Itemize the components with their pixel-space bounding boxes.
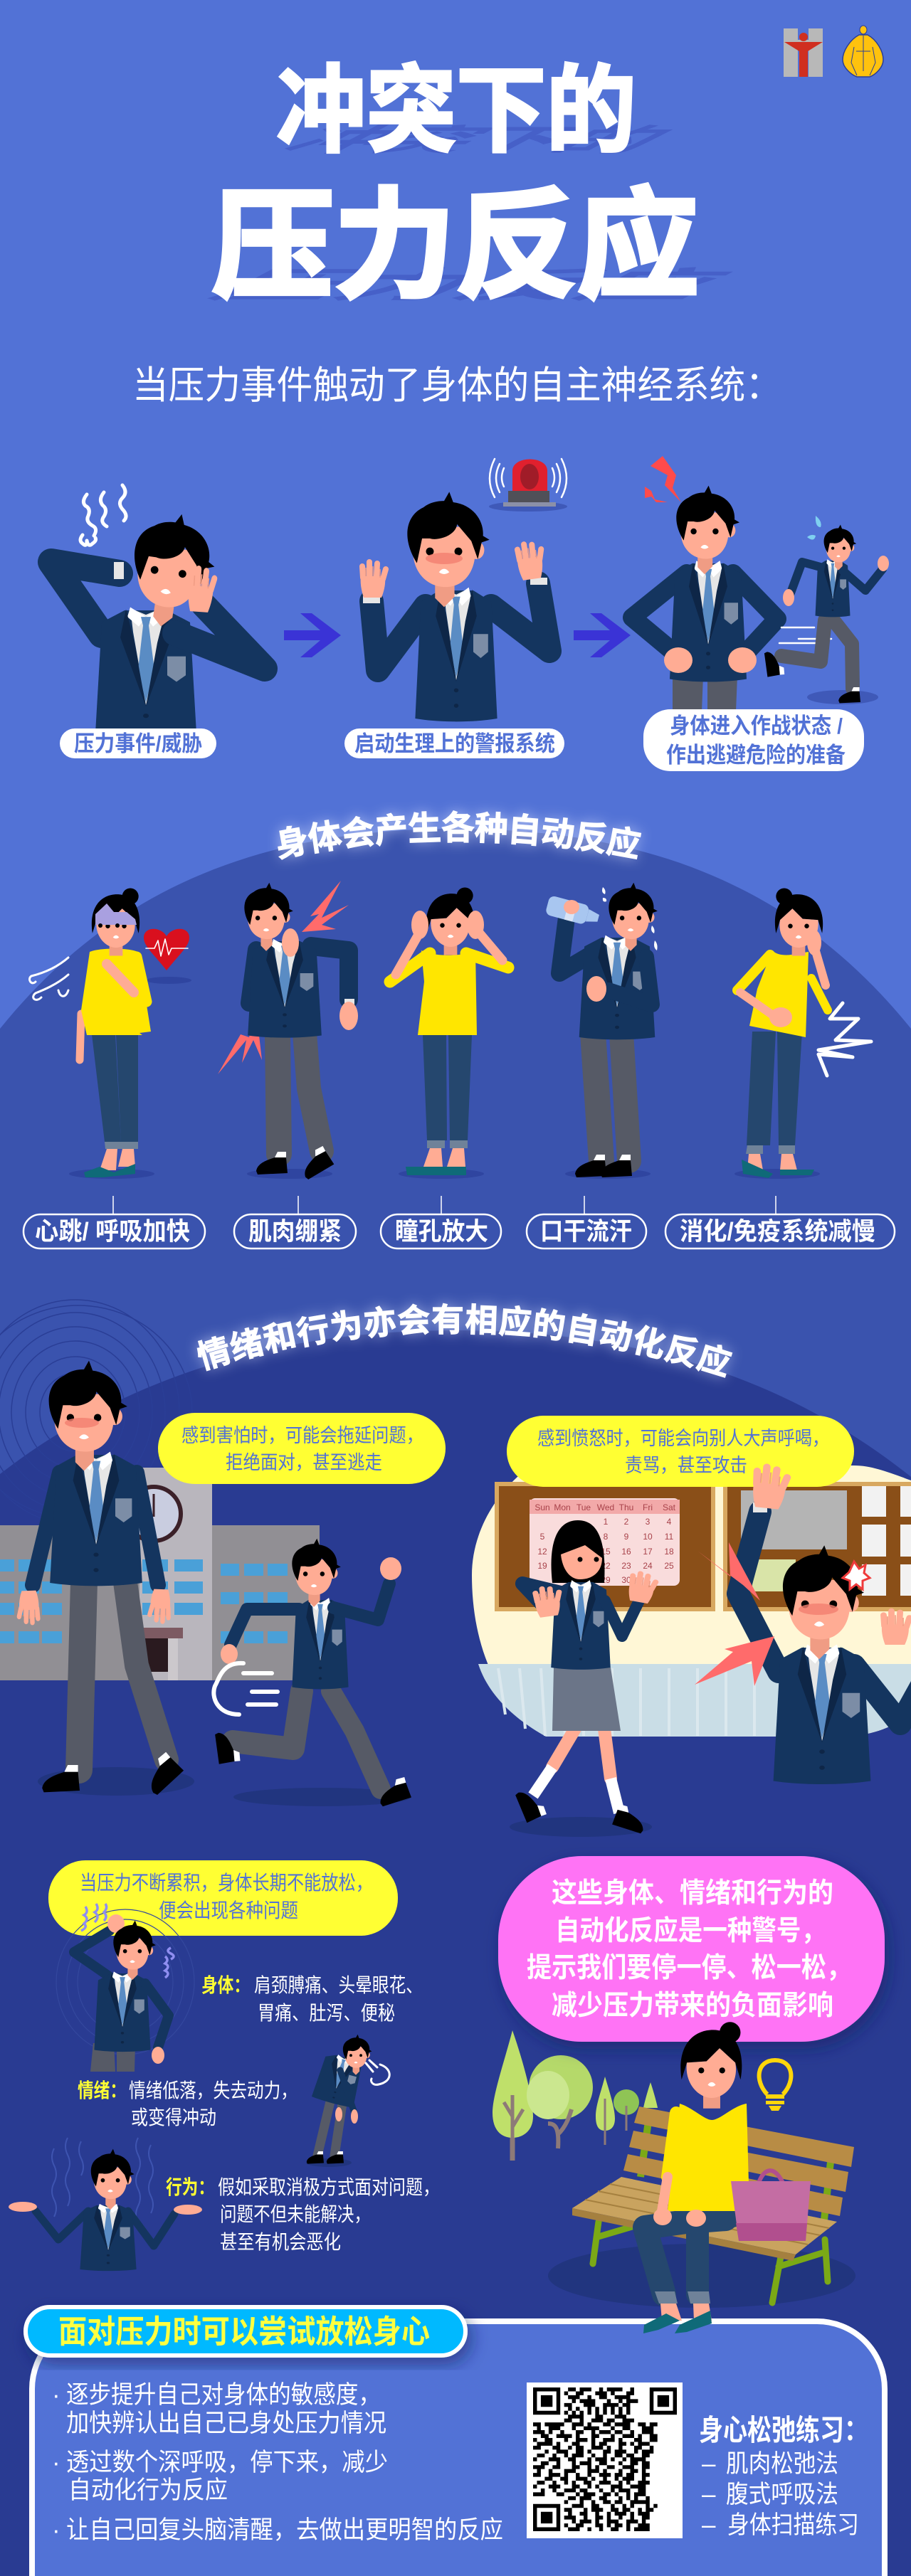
bubble: warning message (498, 1856, 885, 2042)
label: pupils (381, 1214, 501, 1249)
icon: white jagged spark (818, 1003, 871, 1076)
title (192, 58, 749, 313)
label: digestion: 消化/免疫系统减慢 (680, 1218, 875, 1246)
calendar: 29 (601, 1575, 611, 1585)
scene: woman relaxing on bench (548, 2022, 855, 2333)
handbag (731, 2170, 811, 2241)
bubble: when afraid: 感到害怕时，可能会拖延问题， (181, 1425, 423, 1446)
text: behaviour problems (166, 2176, 440, 2253)
tree 1 (493, 2030, 533, 2161)
icon: worry wavy lines (52, 2138, 153, 2223)
calendar: 4 (667, 1517, 672, 1527)
figure: man hit by stress event (51, 485, 265, 749)
icon: red lightning (645, 456, 681, 502)
pill: fight or flight: 作出逃避危险的准备 (666, 743, 846, 768)
figure: woman with fast heartbeat (30, 888, 191, 1179)
figure: small man running away (764, 516, 889, 704)
relaxation exercises (699, 2414, 868, 2539)
tips text: · (52, 2381, 60, 2409)
figure: woman with dilated pupils (390, 887, 508, 1179)
heading: body automatic reactions: 身体会产生各种自动反应 (278, 810, 642, 860)
title shadow: 冲突下的 (265, 123, 690, 157)
title shadow: 压力反应 (192, 266, 749, 305)
calendar: 3 (646, 1517, 651, 1527)
calendar: 25 (664, 1561, 674, 1571)
tips text: 自动化行为反应 (68, 2476, 228, 2504)
text: body problems: 身体： (201, 1974, 250, 1996)
tips text: 让自己回复头脑清醒，去做出更明智的反应 (66, 2516, 503, 2544)
calendar: 11 (665, 1532, 674, 1542)
woman torso (668, 2104, 749, 2211)
tips text: 透过数个深呼吸，停下来，减少 (66, 2449, 388, 2476)
figure: man with dizziness (56, 1904, 194, 2072)
calendar: Tue (576, 1502, 591, 1512)
bottom panel (32, 2321, 885, 2576)
reaction labels (23, 1196, 895, 1249)
calendar: 18 (664, 1547, 674, 1557)
text: body problems: 肩颈膊痛、头晕眼花、 (254, 1974, 423, 1996)
figure: man with physiological alarm (361, 459, 567, 721)
step labels (60, 709, 864, 771)
title line 1: 冲突下的 (276, 58, 636, 164)
figure: man shrugging (9, 2138, 202, 2271)
bubble: warning message: 自动化反应是一种警号， (555, 1916, 826, 1946)
calendar: Sun (535, 1502, 550, 1512)
arrow 2 (574, 613, 631, 657)
calendar: Wed (597, 1502, 614, 1512)
calendar: 5 (540, 1532, 545, 1542)
calendar: 16 (621, 1547, 631, 1557)
calendar: 9 (624, 1532, 629, 1542)
icon: red lightning bolts (695, 1542, 774, 1686)
icon: dizziness squiggles (81, 1904, 174, 1978)
pill: fight or flight: 身体进入作战状态 / (670, 714, 843, 738)
logo: yellow hands (843, 26, 883, 77)
calendar: 10 (643, 1532, 653, 1542)
icon: lightning arm (218, 1011, 262, 1074)
subtitle: 当压力事件触动了身体的自主神经系统： (132, 364, 781, 407)
icon: breath wind (30, 958, 68, 1000)
label: heartbeat: 心跳/ 呼吸加快 (35, 1218, 190, 1246)
white paper sheets (862, 1486, 911, 1596)
school windows (0, 1559, 288, 1643)
label: dry mouth: 口干流汗 (540, 1218, 632, 1246)
relaxation exercises: 腹式呼吸法 (726, 2481, 838, 2508)
text: behaviour problems: 假如采取消极方式面对问题， (218, 2176, 440, 2198)
tips text: · (52, 2449, 60, 2476)
icon: sweat drops (602, 887, 658, 950)
bubble: when angry: 责骂，甚至攻击 (625, 1455, 747, 1476)
relaxation exercises: – (702, 2481, 716, 2508)
calendar: 23 (621, 1561, 631, 1571)
calendar: 17 (643, 1547, 653, 1557)
calendar: Sat (663, 1502, 676, 1512)
park trees (493, 2030, 658, 2161)
logos (784, 26, 883, 77)
calendar: 30 (621, 1575, 631, 1585)
heading pill: try relaxing (26, 2307, 465, 2355)
school clock (127, 1487, 181, 1541)
calendar: 19 (537, 1561, 547, 1571)
title line 2: 压力反应 (212, 179, 699, 313)
icon: water bottle (545, 895, 601, 928)
label: dry mouth (527, 1214, 646, 1249)
scene: classroom wall (472, 1465, 911, 1737)
connector lines (113, 1196, 776, 1214)
heading: body automatic reactions: 身体会产生各种自动反应 (273, 805, 646, 866)
icon: anger mark (843, 1562, 870, 1589)
background dome: body reactions (0, 829, 911, 1494)
calendar: 24 (643, 1561, 653, 1571)
small trees (596, 2077, 658, 2145)
icon: sweat drops (807, 516, 821, 540)
icon: dust cloud (214, 1663, 278, 1714)
figure: man bent over (306, 2035, 389, 2167)
figure: woman with slowed digestion (734, 888, 871, 1179)
icon: light bulb (759, 2060, 791, 2111)
woman legs (645, 2215, 732, 2294)
text: emotion problems (78, 2079, 297, 2129)
pill: stress event: 压力事件/威胁 (74, 731, 202, 756)
tips text (52, 2381, 503, 2544)
relaxation exercises: 肌肉松弛法 (726, 2450, 838, 2478)
calendar: Mon (554, 1502, 571, 1512)
calendar: 22 (601, 1561, 611, 1571)
ripple rings (0, 1300, 192, 1525)
bubble: when afraid (158, 1413, 446, 1484)
bulletin board left (497, 1484, 713, 1609)
calendar: 1 (604, 1517, 609, 1527)
relaxation exercises: 身心松弛练习： (699, 2414, 868, 2447)
text: behaviour problems: 甚至有机会恶化 (220, 2231, 341, 2253)
background dome: emotions and behaviour (0, 1330, 911, 2576)
figure: man with tense muscles (218, 881, 358, 1180)
heading pill: try relaxing: 面对压力时可以尝试放松身心 (58, 2313, 430, 2350)
bubble: when afraid: 拒绝面对，甚至逃走 (226, 1452, 382, 1473)
logo: grey H with red figure (784, 28, 823, 77)
calendar (530, 1498, 680, 1586)
bench (572, 2106, 854, 2303)
bubble: when stress accumulates: 当压力不断累积，身体长期不能放松， (80, 1872, 373, 1894)
bubble: warning message: 提示我们要停一停、松一松， (527, 1953, 851, 1983)
bulletin board right (725, 1484, 911, 1609)
calendar: Thu (619, 1502, 633, 1512)
calendar: Fri (643, 1502, 653, 1512)
tips text: · (52, 2516, 60, 2544)
icon: speed lines (779, 627, 831, 643)
tips text: 加快辨认出自己已身处压力情况 (66, 2410, 386, 2437)
colour chart sheet (752, 1559, 796, 1591)
pill: fight or flight (643, 709, 864, 771)
bubble: when stress accumulates (48, 1860, 398, 1936)
pill: start alarm: 启动生理上的警报系统 (354, 731, 555, 756)
figure: schoolgirl (510, 1520, 657, 1837)
icon: stress squiggle (80, 485, 126, 545)
arrow 1 (284, 613, 341, 657)
bubble: warning message: 这些身体、情绪和行为的 (552, 1878, 833, 1909)
bubble: when angry: 感到愤怒时，可能会向别人大声呼喝， (537, 1428, 829, 1449)
icon: cough puff (366, 2060, 389, 2084)
icon: lightning shoulder (302, 881, 349, 932)
figure: running man escaping (214, 1539, 411, 1807)
heading: emotions and behaviour: 情绪和行为亦会有相应的自动化反应 (196, 1303, 733, 1378)
figure: big man frightened (19, 1361, 194, 1796)
text: emotion problems: 情绪低落，失去动力， (129, 2079, 297, 2101)
calendar: 2 (624, 1517, 629, 1527)
icon: heart with pulse (144, 929, 191, 984)
bubble: when stress accumulates: 便会出现各种问题 (159, 1899, 298, 1922)
school building (0, 1468, 320, 1680)
bubble: when angry (507, 1416, 854, 1487)
QR code (527, 2382, 683, 2538)
calendar: 12 (537, 1547, 547, 1557)
bubble: warning message: 减少压力带来的负面影响 (552, 1991, 833, 2021)
title shadow (192, 123, 749, 305)
figure: angry man (695, 1465, 911, 1784)
text: body problems (201, 1974, 423, 2024)
relaxation exercises: 身体扫描练习 (727, 2511, 859, 2539)
text: behaviour problems: 行为： (166, 2176, 214, 2198)
calendar: 15 (601, 1547, 611, 1557)
figure: man in fight or flight state (632, 456, 777, 711)
text: emotion problems: 情绪： (78, 2079, 126, 2101)
text: emotion problems: 或变得冲动 (131, 2106, 216, 2129)
label: pupils: 瞳孔放大 (395, 1218, 488, 1246)
relaxation exercises: – (702, 2450, 716, 2478)
tips text: 逐步提升自己对身体的敏感度， (66, 2381, 381, 2409)
text: body problems: 胃痛、肚泻、便秘 (258, 2002, 395, 2024)
icon: alarm siren (489, 459, 567, 512)
text: behaviour problems: 问题不但未能解决， (220, 2203, 371, 2225)
screen (741, 1490, 847, 1549)
relaxation exercises: – (702, 2511, 716, 2539)
school door (142, 1628, 183, 1680)
label: muscles: 肌肉绷紧 (248, 1218, 342, 1246)
calendar: 8 (604, 1532, 609, 1542)
floor stripes (498, 1668, 783, 1736)
figure: man with dry mouth and sweat (545, 883, 658, 1179)
tree 2 (527, 2055, 593, 2148)
heading: emotions and behaviour: 情绪和行为亦会有相应的自动化反应 (191, 1298, 737, 1383)
label: muscles (234, 1214, 356, 1249)
